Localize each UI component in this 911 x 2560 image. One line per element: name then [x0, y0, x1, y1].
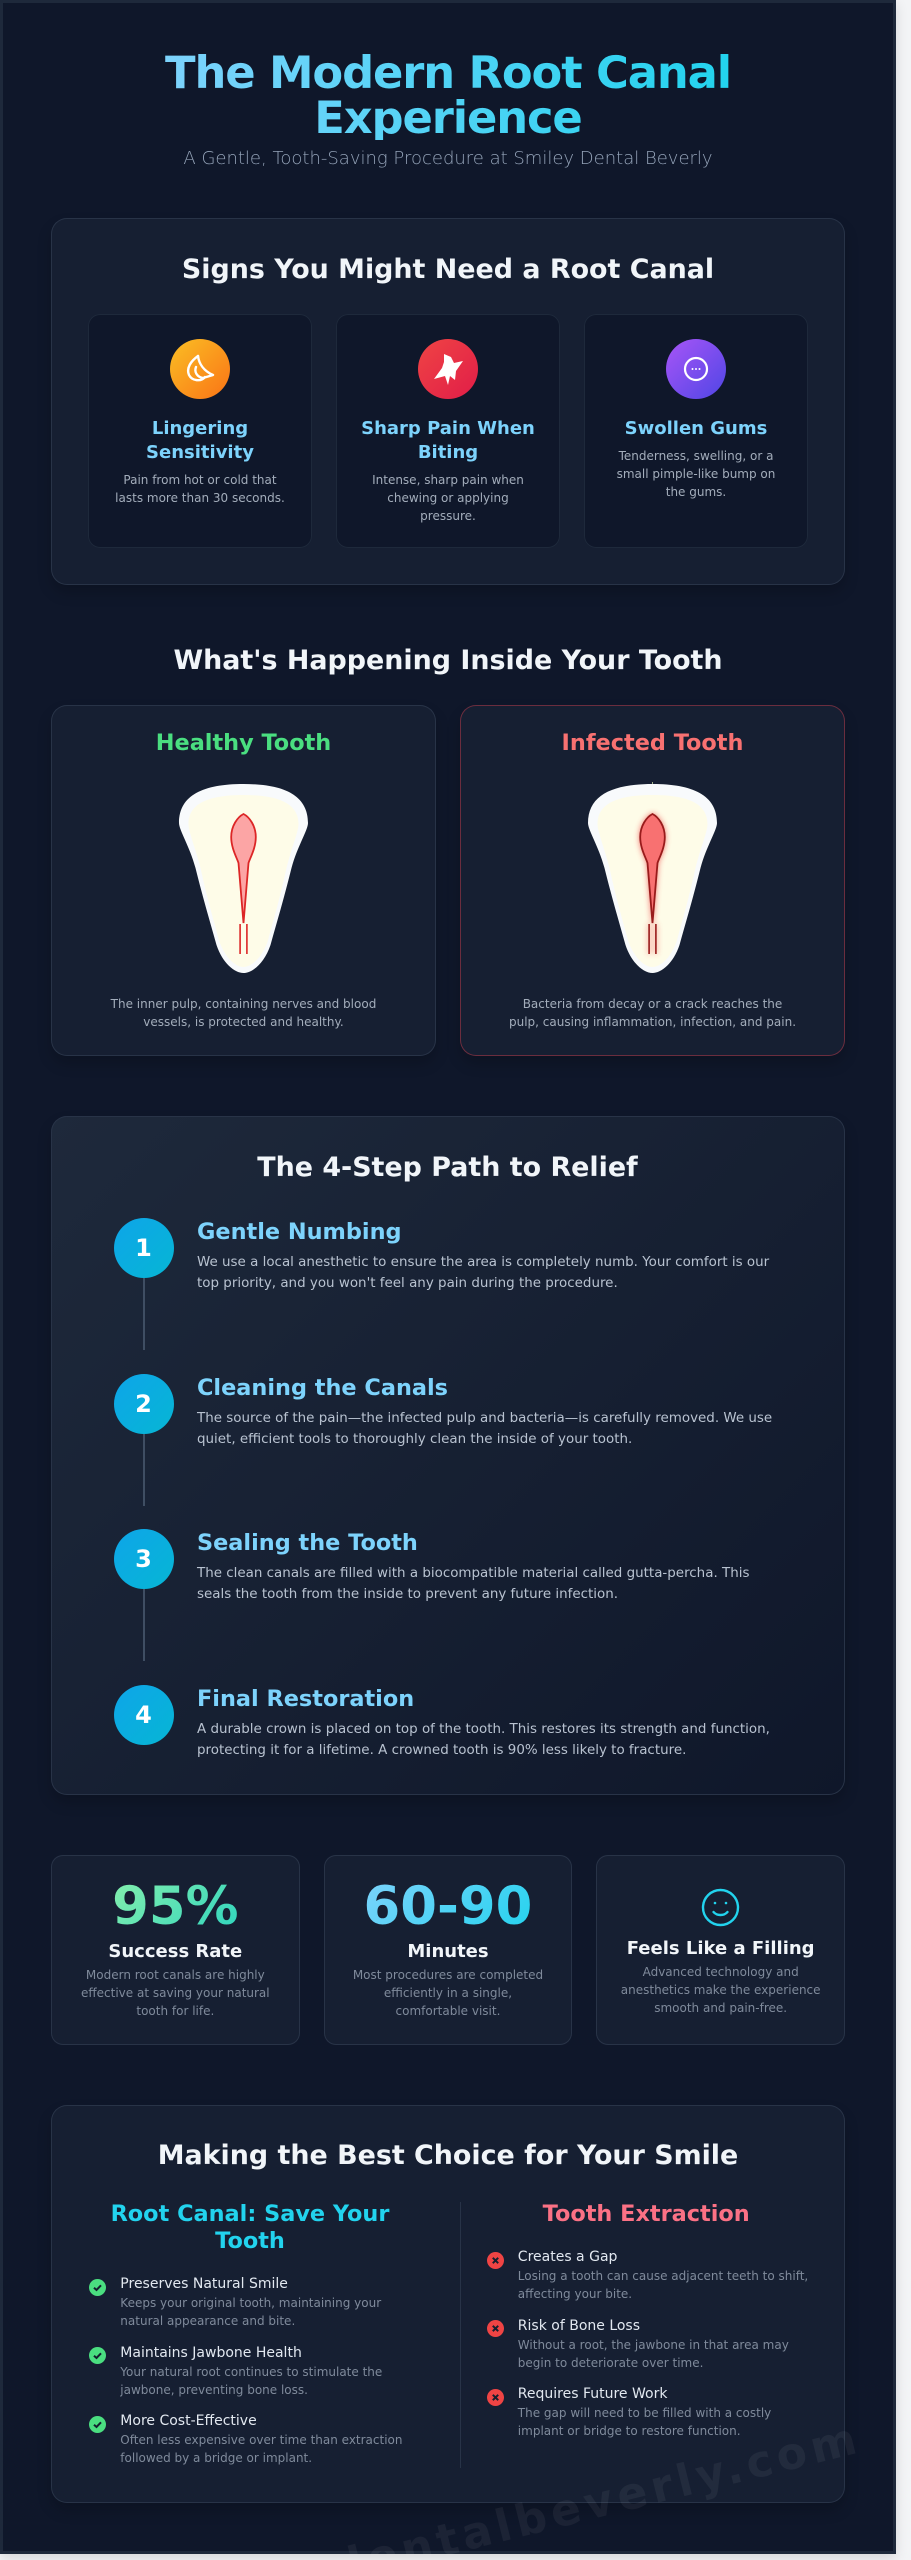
- card text: [115, 473, 285, 505]
- item text: [120, 2365, 382, 2397]
- item title: More Cost-Effective: [120, 2413, 257, 2429]
- heading: signs: Signs You Might Need a Root Canal: [182, 254, 714, 285]
- step text: [197, 1255, 770, 1291]
- stat label: Minutes: [407, 1941, 489, 1962]
- icon: sensitivity: [170, 339, 230, 399]
- step text: [196, 1410, 772, 1446]
- connector 1: [142, 1278, 144, 1350]
- step 2: [114, 1374, 772, 1506]
- icon: check: [89, 2347, 106, 2364]
- stat text: Advanced technology and: [643, 1965, 799, 1979]
- stat text: tooth for life.: [136, 2004, 214, 2018]
- stat text: [81, 1968, 270, 2018]
- item text: Often less expensive over time than extraction: [120, 2433, 402, 2447]
- item title: Risk of Bone Loss: [518, 2318, 640, 2334]
- stat card: success rate: [51, 1855, 300, 2045]
- item text: [120, 2433, 402, 2465]
- card: sharp pain: [336, 314, 560, 548]
- title: [165, 50, 731, 140]
- item text: affecting your bite.: [518, 2287, 632, 2301]
- stat number: 60-90: [364, 1876, 532, 1937]
- stat text: Most procedures are completed: [353, 1968, 543, 1982]
- card heading: Swollen Gums: [625, 418, 767, 438]
- icon: sharp pain: [418, 339, 478, 399]
- item text: followed by a bridge or implant.: [120, 2451, 312, 2465]
- item text: The gap will need to be filled with a costly: [518, 2406, 771, 2420]
- title: The Modern Root Canal: [165, 46, 731, 99]
- item text: begin to deteriorate over time.: [518, 2356, 703, 2370]
- subtitle: A Gentle, Tooth-Saving Procedure at Smiley Dental Beverly: [183, 148, 713, 168]
- card text: small pimple-like bump on: [617, 466, 775, 480]
- stat card: feels like a filling: [596, 1855, 845, 2045]
- panel: infected tooth: [460, 705, 845, 1056]
- stat label: Success Rate: [108, 1941, 242, 1962]
- panel: signs: [51, 218, 845, 585]
- card text: Tenderness, swelling, or a: [619, 448, 773, 462]
- item text: jawbone, preventing bone loss.: [120, 2383, 308, 2397]
- card heading: [146, 418, 254, 462]
- connector 2: [142, 1434, 144, 1506]
- risk: gap: [487, 2249, 808, 2301]
- step 1: [114, 1218, 770, 1350]
- step heading: Cleaning the Canals: [197, 1374, 448, 1400]
- risk: future work: [486, 2385, 826, 2441]
- card text: [372, 473, 524, 523]
- heading: extraction: Tooth Extraction: [543, 2201, 750, 2227]
- caption: infected: Bacteria from decay or a crack reaches the: [523, 997, 782, 1011]
- connector 3: [142, 1589, 144, 1661]
- step number 3: 3: [135, 1545, 152, 1573]
- benefit: jawbone: [89, 2345, 382, 2397]
- step text: A durable crown is placed on top of the tooth. This restores its strength and function,: [197, 1722, 770, 1736]
- step text: seals the tooth from the inside to prevent any future infection.: [197, 1587, 618, 1602]
- stat text: Modern root canals are highly: [86, 1968, 265, 1982]
- stat text: comfortable visit.: [396, 2004, 500, 2018]
- step 3: [114, 1529, 749, 1661]
- step heading: Final Restoration: [197, 1686, 414, 1712]
- risk: bone loss: [487, 2318, 789, 2370]
- item title: Creates a Gap: [518, 2249, 617, 2265]
- card text: Intense, sharp pain when: [372, 473, 524, 487]
- card heading: [361, 418, 535, 462]
- caption: healthy: The inner pulp, containing nerves and blood: [111, 997, 376, 1011]
- item text: Losing a tooth can cause adjacent teeth to shift,: [518, 2269, 808, 2283]
- header: [165, 46, 731, 168]
- item text: Without a root, the jawbone in that area may: [518, 2338, 789, 2352]
- icon: cross: [486, 2389, 504, 2406]
- caption: healthy: [110, 997, 376, 1029]
- heading: root canal: Tooth: [215, 2228, 285, 2254]
- stat label: Feels Like a Filling: [627, 1938, 815, 1959]
- icon: smile: [702, 1888, 740, 1926]
- panel: healthy tooth: [51, 705, 436, 1056]
- step text: quiet, efficient tools to thoroughly clean the inside of your tooth.: [197, 1432, 632, 1446]
- card text: pressure.: [420, 509, 476, 523]
- card text: [617, 448, 775, 498]
- step heading: Sealing the Tooth: [197, 1530, 418, 1556]
- step text: The source of the pain—the infected pulp and bacteria—is carefully removed. We use: [197, 1410, 772, 1426]
- benefit: cost: [89, 2413, 402, 2465]
- diagram: infected tooth: [588, 782, 717, 973]
- stat text: [353, 1968, 543, 2018]
- item text: natural appearance and bite.: [120, 2314, 295, 2328]
- step number 1: 1: [135, 1234, 152, 1262]
- step text: [197, 1722, 770, 1758]
- divider: [460, 2202, 461, 2468]
- item text: [120, 2296, 382, 2328]
- title: Experience: [314, 91, 582, 144]
- heading: root canal: [111, 2201, 390, 2254]
- caption: infected: pulp, causing inflammation, infection, and pain.: [509, 1015, 796, 1029]
- step number 4: [114, 1684, 174, 1744]
- item title: Preserves Natural Smile: [120, 2276, 288, 2292]
- icon: check: [89, 2416, 106, 2433]
- panel: 4-step path: [51, 1116, 845, 1795]
- step number 1: [114, 1218, 174, 1278]
- item text: Keeps your original tooth, maintaining your: [120, 2296, 381, 2310]
- heading: healthy: Healthy Tooth: [156, 730, 331, 756]
- card text: lasts more than 30 seconds.: [115, 491, 285, 505]
- heading: comparison: Making the Best Choice for Your Smile: [158, 2140, 738, 2171]
- item text: Your natural root continues to stimulate the: [120, 2365, 382, 2379]
- icon: swollen gums: [666, 339, 726, 399]
- heading: inside your tooth: What's Happening Inside Your Tooth: [173, 644, 723, 676]
- caption: healthy: vessels, is protected and healthy.: [143, 1015, 344, 1029]
- step heading: Gentle Numbing: [197, 1219, 402, 1245]
- step text: We use a local anesthetic to ensure the area is completely numb. Your comfort is our: [197, 1255, 769, 1270]
- item title: Requires Future Work: [518, 2386, 667, 2402]
- item title: Maintains Jawbone Health: [120, 2345, 302, 2361]
- stat text: effective at saving your natural: [81, 1986, 270, 2000]
- stat text: smooth and pain-free.: [654, 2001, 787, 2015]
- stat text: anesthetics make the experience: [621, 1983, 821, 1997]
- item text: [518, 2404, 771, 2440]
- icon: check: [89, 2279, 106, 2296]
- step number 4: 4: [135, 1700, 152, 1728]
- step text: top priority, and you won't feel any pain during the procedure.: [197, 1276, 618, 1291]
- stat text: [621, 1965, 821, 2015]
- heading: root canal: Root Canal: Save Your: [111, 2201, 389, 2227]
- card heading: Sharp Pain When: [361, 418, 535, 438]
- card heading: Lingering: [152, 418, 248, 438]
- card heading: Biting: [418, 442, 478, 462]
- card heading: Sensitivity: [146, 442, 254, 462]
- heading: infected: Infected Tooth: [562, 730, 743, 756]
- step number 2: 2: [135, 1390, 152, 1418]
- card text: the gums.: [666, 484, 726, 498]
- stat card: minutes: [324, 1855, 572, 2045]
- stat text: efficiently in a single,: [384, 1986, 512, 2000]
- step 4: [114, 1685, 770, 1758]
- icon: cross: [487, 2252, 504, 2269]
- step number 2: [114, 1374, 174, 1434]
- step number 3: [114, 1529, 174, 1589]
- step text: [196, 1566, 749, 1602]
- item text: [518, 2269, 808, 2301]
- step text: The clean canals are filled with a biocompatible material called gutta-percha. This: [197, 1566, 749, 1581]
- caption: infected: [509, 997, 796, 1029]
- step text: protecting it for a lifetime. A crowned tooth is 90% less likely to fracture.: [197, 1742, 686, 1758]
- icon: cross: [487, 2320, 504, 2337]
- heading: steps: The 4-Step Path to Relief: [257, 1152, 638, 1183]
- card: lingering sensitivity: [88, 314, 312, 548]
- item text: implant or bridge to restore function.: [518, 2424, 741, 2438]
- diagram: healthy tooth: [178, 784, 308, 973]
- card text: Pain from hot or cold that: [123, 473, 277, 487]
- card text: chewing or applying: [387, 491, 509, 505]
- item text: [518, 2338, 789, 2370]
- card: swollen gums: [584, 314, 808, 548]
- panel: comparison: [51, 2105, 845, 2503]
- benefit: natural smile: [89, 2276, 382, 2328]
- stat number: 95%: [112, 1876, 239, 1937]
